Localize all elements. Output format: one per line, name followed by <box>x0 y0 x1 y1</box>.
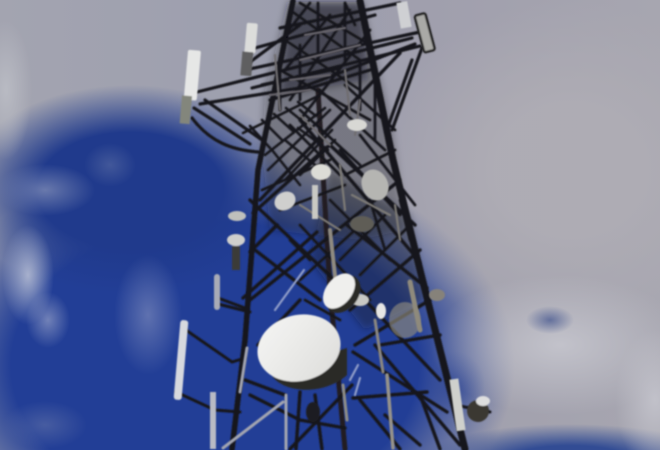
antenna: upper left panel <box>180 50 201 124</box>
lattice fill upper <box>262 3 415 320</box>
tower lattice <box>176 1 490 449</box>
small fittings <box>227 185 445 338</box>
dish: large <box>250 306 348 390</box>
antennas <box>174 1 490 449</box>
lighter steel members <box>223 28 420 449</box>
antenna: lower left rods <box>174 274 220 449</box>
cross bracing <box>243 53 460 449</box>
ladder section <box>243 95 335 185</box>
dish: medium <box>316 267 368 320</box>
antenna: right lower panel <box>449 379 490 431</box>
side mount arms <box>176 298 490 412</box>
dark mass of dense lattice <box>262 2 425 330</box>
tower legs <box>232 1 465 449</box>
antenna: upper second panel <box>244 23 258 53</box>
dark blob under dish <box>306 402 320 422</box>
upper platform <box>192 3 422 152</box>
dish: small ones <box>271 119 394 319</box>
antenna: top right panel <box>396 1 435 53</box>
